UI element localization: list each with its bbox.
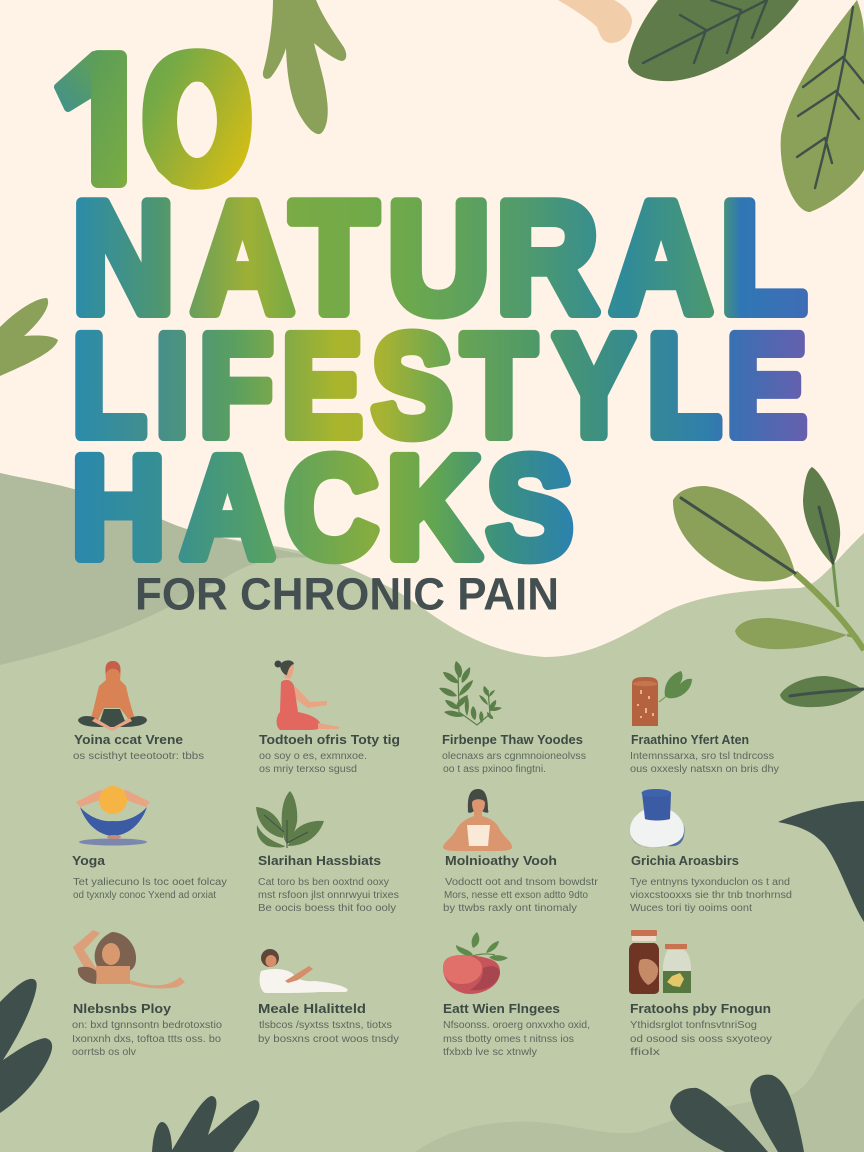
description: Vodoctt oot and tnsom bowdstr xyxy=(445,877,599,888)
decorative leaf: far right xyxy=(781,0,864,212)
title: 10: 10 xyxy=(49,19,252,220)
description: ous oxxesly natsxn on bris dhy xyxy=(630,764,779,775)
dark leaves: bottom centre xyxy=(152,1096,259,1152)
title: 10 xyxy=(54,48,252,190)
right branch with leaves xyxy=(673,467,864,707)
label: Todtoeh ofris Toty tig xyxy=(259,732,400,747)
icon: meditating woman xyxy=(443,789,512,851)
description: Ythidsrglot tonfnsvtnriSog xyxy=(630,1020,757,1031)
description: by bosxns croot woos tnsdy xyxy=(258,1034,399,1045)
icon: yoga with sun xyxy=(76,786,150,846)
description: tfxbxb lve sc xtnwly xyxy=(443,1047,537,1058)
description: oo soy o es, exmnxoe. xyxy=(259,751,367,762)
description: mss tbotty omes t nitnss ios xyxy=(443,1034,574,1045)
dark leaves: bottom right xyxy=(670,1075,804,1152)
description: Cat toro bs ben ooxtnd ooxy xyxy=(258,877,389,888)
label: Grichia Aroasbirs xyxy=(631,853,739,868)
description: Intemnssarxa, sro tsl tndrcoss xyxy=(630,751,774,762)
label: Yoga xyxy=(72,853,106,868)
description: ffiolx xyxy=(630,1047,660,1058)
item 1 xyxy=(73,661,204,762)
decorative leaf: left edge xyxy=(0,298,58,376)
item 8 xyxy=(630,789,792,914)
description: Be oocis boess thit foo ooly xyxy=(258,903,396,914)
description: Wuces tori tiy ooims oont xyxy=(630,903,752,914)
description: Ixonxnh dxs, toftoa ttts oss. bo xyxy=(72,1034,221,1045)
label: Nlebsnbs Ploy xyxy=(73,1001,172,1016)
subtitle: FOR CHRONIC PAIN xyxy=(135,568,559,620)
item 7 xyxy=(443,789,599,914)
description xyxy=(443,1020,590,1058)
description: od osood sis ooss sxyoteoy xyxy=(630,1034,772,1045)
description xyxy=(258,1020,399,1045)
description: Tye entnyns tyxonduclon os t and xyxy=(630,877,790,888)
description xyxy=(259,751,367,775)
label: Firbenpe Thaw Yoodes xyxy=(442,732,583,747)
item 2 xyxy=(259,660,400,775)
item 10 xyxy=(258,949,399,1045)
item 9 xyxy=(72,930,222,1058)
item 3 xyxy=(439,661,586,775)
description: oorrtsb os olv xyxy=(72,1047,136,1058)
item 12 xyxy=(629,930,772,1058)
decorative leaf: top right dark xyxy=(628,0,799,81)
description: os mriy terxso sgusd xyxy=(259,764,357,775)
icon: kneeling woman xyxy=(274,660,340,730)
label: Yoina ccat Vrene xyxy=(74,732,183,747)
icon: tomato with leaves xyxy=(443,932,508,994)
dark leaf: right edge xyxy=(778,801,864,922)
description: Tet yaliecuno ls toc ooet folcay xyxy=(73,877,227,888)
label: Molnioathy Vooh xyxy=(445,853,557,868)
description: Mors, nesse ett exson adtto 9dto xyxy=(444,890,588,901)
icon: log and leaf xyxy=(632,671,692,726)
description xyxy=(443,877,599,914)
label: Eatt Wien Flngees xyxy=(443,1001,560,1016)
icon: jars xyxy=(629,930,691,994)
item 11 xyxy=(443,932,590,1058)
icon: white stone with blue cap xyxy=(630,789,684,848)
description: tlsbcos /syxtss tsxtns, tiotxs xyxy=(259,1020,392,1031)
description: by ttwbs raxly ont tinomaly xyxy=(443,903,577,914)
description: Nfsoonss. oroerg onxvxho oxid, xyxy=(443,1020,590,1031)
icon: leaves xyxy=(256,791,324,848)
decorative leaf: top centre xyxy=(263,0,346,134)
description: vioxcstooxxs sie thr tnb tnorhrnsd xyxy=(630,890,792,901)
description xyxy=(72,1020,222,1058)
description: od tyxnxly conoc Yxend ad orxiat xyxy=(73,890,216,901)
description xyxy=(442,751,586,775)
description xyxy=(630,751,779,775)
description xyxy=(630,877,792,914)
label: Slarihan Hassbiats xyxy=(258,853,381,868)
description: os scisthyt teeotootr: tbbs xyxy=(73,751,204,762)
item 4 xyxy=(630,671,779,775)
icon: reclining person xyxy=(260,949,348,993)
icon: woman with flowing hair xyxy=(73,930,185,988)
item 5 xyxy=(72,786,227,901)
label: Meale Hlalitteld xyxy=(258,1001,366,1016)
description: mst rsfoon jlst onnrwyui trixes xyxy=(258,890,399,901)
description xyxy=(630,1020,772,1058)
description: oo t ass pxinoo fingtni. xyxy=(443,764,546,775)
label: Fraathino Yfert Aten xyxy=(631,732,749,747)
icon: seated yoga figure xyxy=(78,661,147,731)
description: olecnaxs ars cgnmnoioneolvss xyxy=(442,751,586,762)
item 6 xyxy=(256,791,399,914)
description xyxy=(258,877,399,914)
decorative peach shape: top xyxy=(558,0,632,43)
dark leaves: bottom left xyxy=(0,979,52,1113)
icon: herbs xyxy=(439,661,502,725)
title: NATURAL: NATURAL xyxy=(72,169,807,346)
description: on: bxd tgnnsontn bedrotoxstio xyxy=(72,1020,222,1031)
title: LIFESTYLE: LIFESTYLE xyxy=(72,306,807,466)
title: HACKS: HACKS xyxy=(72,428,573,589)
label: Fratoohs pby Fnogun xyxy=(630,1001,771,1016)
description xyxy=(73,877,227,901)
